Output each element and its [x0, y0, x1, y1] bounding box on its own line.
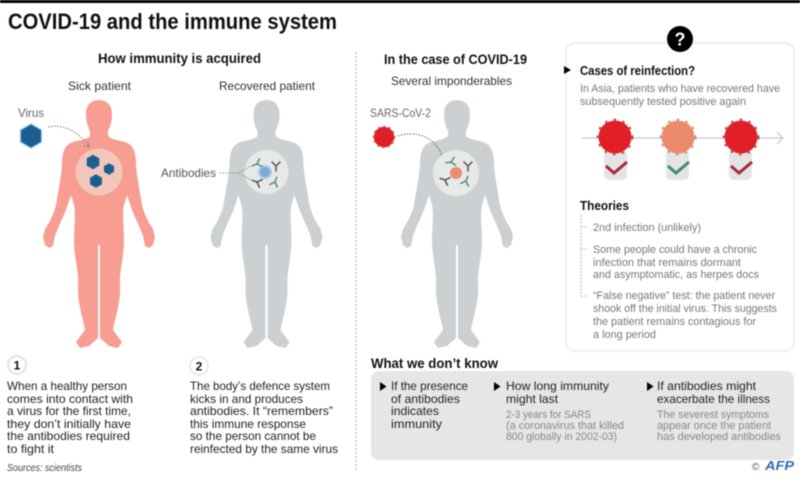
- item: duration: 800 globally in 2002-03): [506, 431, 617, 443]
- item: exacerbation: exacerbate the illness: [657, 392, 770, 406]
- item: immunity: immunity: [391, 417, 442, 431]
- panel: COVID-19 case: [370, 52, 527, 348]
- item: immunity: indicates: [391, 404, 439, 418]
- theory 1: 2nd infection (unlikely): [593, 222, 701, 234]
- item: duration: How long immunity: [506, 379, 609, 393]
- item: duration: 2-3 years for SARS: [506, 409, 591, 421]
- step 2 badge: [190, 357, 208, 375]
- item: exacerbation: The severest symptoms: [657, 409, 769, 421]
- theory 2: Some people could have a chronic: [593, 244, 757, 256]
- item: exacerbation: If antibodies might: [657, 379, 757, 393]
- label: recovered patient: Recovered patient: [219, 79, 316, 93]
- theory 3: a long period: [593, 329, 656, 341]
- theory 3: shook off the initial virus. This suggests: [593, 303, 777, 315]
- subheading: several imponderables: Several imponderables: [391, 74, 512, 88]
- sources: Sources: scientists: [7, 463, 82, 474]
- text: step 2: The body’s defence system: [190, 379, 330, 393]
- panel: sick patient: [7, 79, 155, 456]
- icon: SARS-CoV-2: [373, 126, 395, 148]
- heading: theories: Theories: [580, 199, 629, 213]
- test 1: positive: [598, 120, 632, 180]
- text: step 1: to fight it: [7, 442, 55, 456]
- heading: cases of reinfection: Cases of reinfection?: [580, 64, 695, 78]
- immune area with antibodies: [244, 150, 288, 194]
- text: step 1: the antibodies required: [7, 429, 130, 443]
- body silhouette: COVID case: [401, 100, 513, 348]
- theory 2: and asymptomatic, as herpes docs: [593, 269, 759, 281]
- text: step 2: so the person cannot be: [190, 429, 316, 443]
- item: exacerbation: appear once the patient: [657, 420, 771, 432]
- icon: question mark: [667, 26, 693, 52]
- panel: cases of reinfection: [564, 26, 794, 351]
- text: step 1: When a healthy person: [7, 379, 127, 393]
- item: exacerbation: has developed antibodies: [657, 431, 781, 443]
- heading: in the case of COVID-19: In the case of COVID-19: [384, 52, 527, 67]
- text: step 1: a virus for the first time,: [7, 404, 131, 418]
- item: immunity: If the presence: [391, 379, 468, 393]
- body silhouette: recovered: [210, 100, 322, 348]
- text: step 2: kicks in and produces: [190, 392, 303, 406]
- step 1 badge: [8, 356, 26, 374]
- credit: AFP: ©: [752, 462, 760, 473]
- text: step 1: they don’t initially have: [7, 417, 131, 431]
- credit: AFP: [752, 458, 794, 473]
- panel: recovered patient: [161, 79, 338, 456]
- test 3: positive: [724, 120, 758, 180]
- step 2 badge: 2: [196, 360, 203, 374]
- item: immunity: of antibodies: [391, 392, 460, 406]
- text: step 2: reinfected by the same virus: [190, 442, 338, 456]
- credit: AFP: AFP: [764, 458, 794, 473]
- text: step 2: this immune response: [190, 417, 306, 431]
- top bar: [0, 0, 800, 3]
- arrow: coronavirus entering: [398, 134, 446, 160]
- body silhouette: sick: [43, 100, 155, 348]
- theory 2: infection that remains dormant: [593, 257, 741, 269]
- theory 3: the patient remains contagious for: [593, 316, 756, 328]
- item: exacerbation: [647, 379, 781, 443]
- label: antibodies: Antibodies: [161, 166, 216, 180]
- antibody pointers: [220, 165, 253, 181]
- heading: how immunity is acquired: How immunity is acquired: [98, 51, 261, 66]
- item: duration: (a coronavirus that killed: [506, 420, 624, 432]
- arrow: virus entering: [48, 126, 89, 147]
- step 1 badge: 1: [14, 358, 21, 372]
- infected area: [76, 148, 122, 196]
- heading: what we don't know: What we don’t know: [371, 356, 498, 371]
- title: COVID-19 and the immune system: [8, 9, 337, 34]
- text: Asia: In Asia, patients who have recovered have: [580, 83, 780, 95]
- icon: virus: [20, 123, 42, 149]
- text: Asia: subsequently tested positive again: [580, 96, 746, 108]
- timeline arrow: [582, 132, 783, 144]
- panel: what we don't know: [371, 371, 794, 460]
- immune area with antibodies: [433, 150, 479, 196]
- theory 3: “False negative” test: the patient never: [593, 290, 775, 302]
- label: virus: Virus: [18, 106, 44, 120]
- marker: [564, 66, 571, 74]
- text: step 1: comes into contact with: [7, 392, 133, 406]
- test 2: negative: [660, 120, 696, 180]
- text: step 2: antibodies. It “remembers”: [190, 404, 333, 418]
- label: SARS-CoV-2: SARS-CoV-2: [370, 108, 431, 120]
- label: sick patient: Sick patient: [68, 79, 132, 93]
- item: immunity: [380, 379, 471, 431]
- icon: question mark: ?: [674, 30, 686, 50]
- item: duration: [494, 379, 627, 443]
- item: duration: might last: [506, 392, 559, 406]
